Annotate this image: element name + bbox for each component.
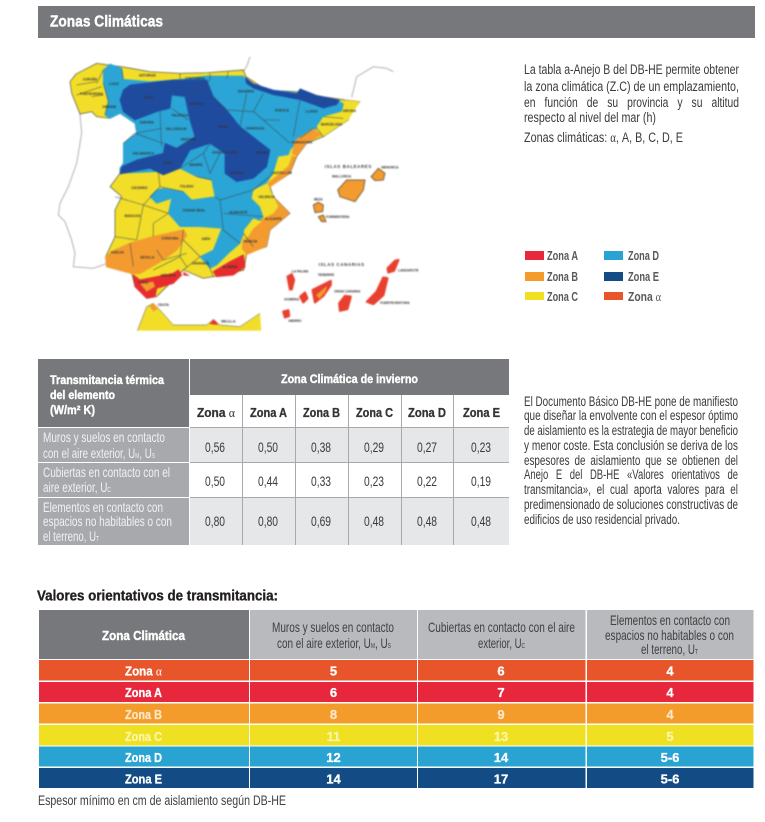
intro text block <box>524 62 739 145</box>
zone column headings: Zona A <box>250 405 288 420</box>
province labels: SEVILLA <box>140 255 155 259</box>
row: zona D: 12 <box>326 750 341 765</box>
island labels: HIERRO <box>289 319 302 323</box>
island labels: IBIZA <box>314 198 323 202</box>
table header: (W/m² K) <box>50 403 95 417</box>
row labels: Cubiertas en contacto con el <box>43 464 170 480</box>
province labels: HUELVA <box>111 250 125 254</box>
province labels: BARCELONA <box>321 122 343 126</box>
row: zona D: 14 <box>494 750 509 765</box>
table values: 0,23 <box>364 473 384 489</box>
island labels: ISLAS CANARIAS <box>319 262 365 267</box>
explanatory text block: edificios de uso residencial privado. <box>524 512 680 527</box>
zone alpha south coast <box>133 270 182 298</box>
province labels: GIRONA <box>343 109 357 113</box>
island labels: TENERIFE <box>318 273 335 277</box>
island labels: GRAN CANARIA <box>334 290 361 294</box>
zone C castellon <box>267 155 292 183</box>
island labels: LA PALMA <box>292 269 309 273</box>
legend: Zona E <box>628 270 659 284</box>
row: zona B <box>39 704 754 724</box>
table header row: Cubiertas en contacto con el aire <box>428 619 575 635</box>
row: zona E <box>39 768 754 788</box>
province labels: CANTABRIA <box>185 76 205 80</box>
zone B andalucia <box>106 230 187 273</box>
intro text block: respecto al nivel del mar (h) <box>524 110 656 125</box>
table values: 0,48 <box>417 513 437 529</box>
island labels: FUERTEVENTURA <box>380 301 410 305</box>
row labels <box>43 429 172 544</box>
canary islands <box>283 260 398 317</box>
province labels: LLEIDA <box>306 110 318 114</box>
province labels: VALLADOLID <box>165 127 187 131</box>
table header row: el terreno, UT <box>641 641 699 657</box>
province labels: ÁVILA <box>163 160 174 165</box>
island labels: LANZAROTE <box>398 269 419 273</box>
zone alpha almeria <box>213 255 245 277</box>
zone column headings <box>197 405 500 420</box>
island labels: FORMENTERA <box>326 215 350 219</box>
zone column headings: Zona D <box>408 405 446 420</box>
ceuta and melilla strip: MELILLA <box>221 319 236 323</box>
legend: Zona D <box>628 249 659 263</box>
province labels: TARRAGONA <box>291 140 313 144</box>
province labels: VALENCIA <box>258 195 276 199</box>
table values: 0,48 <box>471 513 491 529</box>
row labels: espacios no habitables o con <box>43 513 172 529</box>
row labels: el terreno, UT <box>43 528 99 544</box>
row: zona E: 17 <box>494 772 508 786</box>
table values: 0,38 <box>311 439 331 455</box>
table values: 0,56 <box>205 439 225 455</box>
province labels: CÁDIZ <box>138 279 148 284</box>
zone B tarragona <box>292 128 322 157</box>
province labels: ZAMORA <box>139 120 155 124</box>
insulation thickness table <box>39 610 754 788</box>
province labels: MÁLAGA <box>161 273 176 278</box>
legend <box>525 249 661 304</box>
legend: Zona C <box>547 290 578 304</box>
table values: 0,33 <box>311 473 331 489</box>
row: zona alpha: Zona α <box>125 664 162 678</box>
table header: Transmitancia térmica <box>50 373 164 387</box>
province labels: JAÉN <box>201 236 211 241</box>
province borders <box>77 68 343 277</box>
province labels <box>80 73 357 284</box>
province labels: MURCIA <box>244 240 258 244</box>
legend: Zona A <box>547 249 578 263</box>
row: zona alpha <box>39 660 754 680</box>
zone column headings: Zona E <box>463 405 500 420</box>
table values: 0,27 <box>417 439 437 455</box>
zone D <box>103 64 345 268</box>
province labels: BADAJOZ <box>125 214 141 218</box>
mainland base: zone C <box>70 63 360 298</box>
province labels: CÓRDOBA <box>161 236 179 241</box>
row: zona alpha: 4 <box>666 664 674 678</box>
island labels: MENORCA <box>381 166 399 170</box>
table header row: con el aire exterior, UM, US <box>277 635 391 651</box>
table values <box>205 439 491 529</box>
table values: 0,69 <box>311 513 331 529</box>
row: zona A: 7 <box>497 685 505 700</box>
row backgrounds <box>38 395 509 545</box>
zone column headings: Zona B <box>303 405 340 420</box>
island labels: MALLORCA <box>332 175 352 179</box>
title bar <box>38 6 755 38</box>
zone C valencia <box>252 183 280 217</box>
transmittance table <box>38 359 509 545</box>
intro text block: Zonas climáticas: α, A, B, C, D, E <box>524 130 683 145</box>
explanatory text block <box>524 394 738 527</box>
row: zona B: 8 <box>330 707 337 722</box>
province labels: NAVARRA <box>238 90 255 94</box>
legend: Zona α <box>628 290 661 304</box>
province labels: CUENCA <box>230 171 244 175</box>
zone C murcia inner <box>243 218 262 240</box>
title bar: Zonas Climáticas <box>50 14 163 30</box>
row labels: con el aire exterior, UM, US <box>43 445 155 461</box>
row: zona A: Zona A <box>125 685 163 700</box>
table values: 0,80 <box>205 513 225 529</box>
zone C catalonia <box>317 100 360 137</box>
province labels: TOLEDO <box>180 184 194 188</box>
ceuta and melilla strip: CEUTA <box>158 303 170 307</box>
row: zona C: 5 <box>666 729 674 744</box>
province labels: ALICANTE <box>265 217 283 221</box>
row: zona A: 4 <box>666 685 674 700</box>
province labels: MADRID <box>189 163 203 167</box>
neighbouring country borders <box>58 57 393 268</box>
province labels: GUADALAJARA <box>212 150 238 154</box>
province labels: CASTELLÓN <box>271 170 292 175</box>
row: zona B: 4 <box>666 707 674 722</box>
province labels: BURGOS <box>189 102 205 106</box>
ceuta and melilla strip <box>137 303 261 331</box>
row: zona E: 5-6 <box>661 772 679 786</box>
row: zona A: 6 <box>330 685 337 700</box>
province labels: SORIA <box>218 125 229 129</box>
island labels: GOMERA <box>284 298 300 302</box>
table header: del elemento <box>50 388 115 402</box>
row: zona alpha: 6 <box>497 664 505 678</box>
row: zona D <box>39 746 754 766</box>
island labels: ISLAS BALEARES <box>325 164 372 169</box>
province labels: SEGOVIA <box>181 138 197 142</box>
row: zona alpha: 5 <box>330 664 337 678</box>
province labels: CIUDAD REAL <box>183 209 205 213</box>
zone B alicante murcia <box>242 185 290 255</box>
row labels: Elementos en contacto con <box>43 499 163 515</box>
row: zona C: Zona C <box>125 729 163 744</box>
zone column headings: Zona C <box>356 405 394 420</box>
province labels: ORENSE <box>102 105 117 109</box>
province labels: LEÓN <box>144 94 154 99</box>
province labels: PONTEVEDRA <box>80 92 104 96</box>
province labels: GRANADA <box>192 261 210 265</box>
table header row: Zona Climática <box>102 628 186 643</box>
province labels: HUESCA <box>275 108 290 112</box>
table values: 0,50 <box>258 439 278 455</box>
table values: 0,23 <box>471 439 491 455</box>
province labels: ALMERÍA <box>222 264 238 269</box>
zone B valencia coast <box>267 155 296 187</box>
row labels: Muros y suelos en contacto <box>43 429 165 445</box>
table values: 0,44 <box>258 473 278 489</box>
row: zona C <box>39 725 754 746</box>
province labels: TERUEL <box>255 151 268 155</box>
table values: 0,19 <box>471 473 491 489</box>
balearic islands <box>313 168 385 222</box>
table header row: exterior, UC <box>478 635 525 651</box>
row: zona E: 14 <box>326 772 341 786</box>
table values: 0,48 <box>364 513 384 529</box>
table header row: Muros y suelos en contacto <box>272 619 394 635</box>
footnote: Espesor mínimo en cm de aislamiento según DB-HE <box>38 793 286 808</box>
row: zona A <box>39 682 754 702</box>
row: zona B: Zona B <box>125 707 162 722</box>
map of Spain climate zones <box>58 57 419 331</box>
row: zona D: 5-6 <box>661 750 679 765</box>
province labels: ZARAGOZA <box>246 126 265 130</box>
row: zona E: Zona E <box>125 772 162 786</box>
table header row <box>39 610 754 659</box>
row: zona C: 11 <box>327 729 340 744</box>
row labels: aire exterior, UC <box>43 479 111 495</box>
table header <box>38 359 509 427</box>
table header: Zona Climática de invierno <box>281 372 418 386</box>
row: zona C: 13 <box>494 729 508 744</box>
table values: 0,29 <box>364 439 384 455</box>
zone E pyrenees <box>245 77 340 108</box>
table values: 0,22 <box>417 473 437 489</box>
row: zona D: Zona D <box>125 750 162 765</box>
zone column headings: Zona α <box>197 405 235 420</box>
table values: 0,50 <box>205 473 225 489</box>
province labels: LUGO <box>109 82 119 86</box>
table values: 0,80 <box>258 513 278 529</box>
row: zona B: 9 <box>497 707 505 722</box>
province labels: CORUÑA <box>83 76 98 81</box>
province labels: ALBACETE <box>229 210 248 214</box>
legend: Zona B <box>547 270 578 284</box>
province labels: CÁCERES <box>131 185 148 190</box>
island labels <box>284 164 419 323</box>
section heading: Valores orientativos de transmitancia: <box>37 588 278 604</box>
province labels: PALENCIA <box>172 114 189 118</box>
zone E centre <box>120 80 270 182</box>
province labels: ASTURIAS <box>139 73 157 77</box>
province labels: SALAMANCA <box>133 152 155 156</box>
